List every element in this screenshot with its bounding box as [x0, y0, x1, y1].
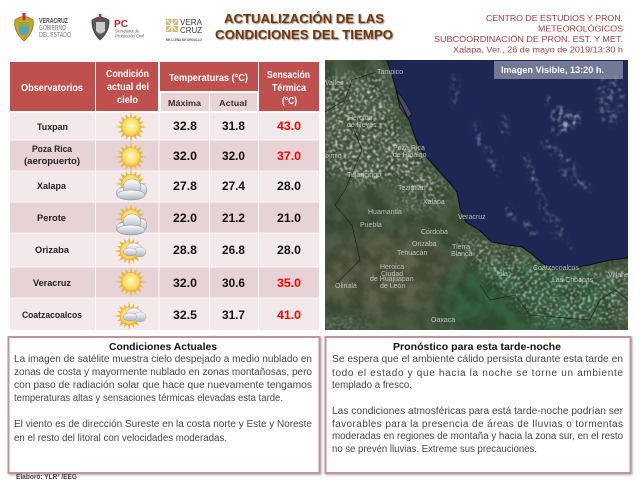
- row: Coatzacoalcos: Coatzacoalcos: [22, 310, 82, 320]
- body text: El viento es de dirección Sureste en la costa norte y Este y Noreste: [14, 419, 312, 430]
- coast and state lines: [325, 60, 628, 320]
- logo: Gobierno del Estado de Veracruz: DEL ESTADO: [39, 32, 71, 39]
- heading: Condiciones Actuales: [109, 341, 217, 353]
- body text: La imagen de satélite muestra cielo despejado a medio nublado en: [14, 354, 312, 365]
- row: Tuxpan: 31.8: [222, 119, 245, 133]
- body text: moderadas en regiones de montaña y hacia la zona sur, en el resto: [332, 431, 623, 442]
- panel: forecast: [326, 337, 630, 473]
- row: Orizaba: Orizaba: [35, 245, 69, 255]
- row: Orizaba: 28.0: [277, 243, 301, 257]
- issuing office: CENTRO DE ESTUDIOS Y PRON.: [486, 13, 623, 23]
- city labels: de Hidalgo: [393, 152, 427, 159]
- row: Xalapa: Xalapa: [37, 181, 66, 191]
- row: Tuxpan: 43.0: [277, 119, 301, 133]
- icon: sunny: [115, 111, 147, 143]
- row: Veracruz: 30.6: [222, 276, 245, 290]
- table header: [10, 62, 319, 111]
- city labels: Orizaba: [412, 241, 437, 248]
- title: CONDICIONES DEL TIEMPO: [215, 27, 393, 42]
- city labels: de Reyes: [347, 122, 377, 129]
- icon: sun with small cloud: [114, 301, 146, 331]
- city labels: Isla: [497, 271, 508, 278]
- issuing office: METEOROLÓGICOS: [538, 24, 623, 34]
- logo: Gobierno del Estado de Veracruz: GOBIERNO: [39, 25, 66, 32]
- row: Perote: Perote: [37, 213, 66, 223]
- icon: sunny: [115, 266, 147, 298]
- icon: ornamental square: [166, 19, 178, 32]
- row: Veracruz: 35.0: [277, 276, 301, 290]
- row: Perote: 22.0: [173, 211, 197, 225]
- row: Perote: 21.0: [277, 211, 301, 225]
- body text: [14, 354, 312, 444]
- row: Tuxpan: 32.8: [173, 119, 197, 133]
- row: Orizaba: 26.8: [222, 243, 245, 257]
- table header: cielo: [117, 95, 138, 106]
- city labels: Ciudad: [381, 271, 403, 278]
- title: ACTUALIZACIÓN DE LAS: [224, 11, 384, 26]
- row: Poza Rica: 32.0: [173, 149, 197, 163]
- icon: sun behind heavy cloud: [115, 168, 147, 200]
- logo: Vera Cruz: [166, 18, 203, 42]
- table header: (°C): [282, 96, 297, 107]
- city labels: Valles: [325, 80, 344, 87]
- city labels: Puebla: [360, 222, 382, 229]
- body text: zonas de costa y mayormente nublado en zonas montañosas, pero: [14, 367, 312, 378]
- icon: grey crest: [92, 14, 109, 40]
- row backgrounds: [10, 113, 319, 330]
- logo: Gobierno del Estado de Veracruz: VERACRUZ: [39, 18, 69, 25]
- image time badge: [494, 61, 623, 79]
- logo: Protección Civil: Secretaría de: [115, 28, 139, 34]
- city labels: de León: [380, 283, 405, 290]
- city labels: Poza Rica: [393, 145, 425, 152]
- row: Coatzacoalcos: 32.5: [173, 308, 197, 322]
- row: Tuxpan: Tuxpan: [37, 122, 68, 132]
- city labels: Villahe: [608, 272, 629, 279]
- body text: templado a fresco.: [332, 380, 412, 391]
- satellite image map: [320, 60, 629, 340]
- panel: observatories table: [10, 62, 319, 331]
- panel: current conditions: [8, 337, 320, 473]
- row: Orizaba: [35, 236, 301, 266]
- city labels: Teziutlán: [398, 185, 426, 192]
- row: Veracruz: [33, 266, 301, 298]
- body text: no se prevén lluvias. Extreme sus precauciones.: [332, 444, 537, 455]
- city labels: Oaxaca: [431, 317, 455, 324]
- row: Xalapa: [37, 168, 301, 200]
- city labels: Huamantla: [368, 209, 402, 216]
- icon: state crest: [15, 13, 33, 41]
- city labels: Coatzacoalcos: [533, 265, 579, 272]
- table header: actual del: [107, 82, 149, 93]
- table header: Condición: [106, 69, 149, 80]
- heading: Pronóstico para esta tarde-noche: [393, 341, 561, 353]
- issuing office: Xalapa, Ver., 26 de mayo de 2019/13:30 h: [453, 44, 623, 54]
- icon: sunny: [115, 141, 147, 173]
- city labels: Tampico: [377, 69, 403, 76]
- body text: Se espera que el ambiente cálido persista durante esta tarde en: [332, 354, 623, 365]
- table header: Sensación: [267, 70, 310, 81]
- row: Coatzacoalcos: [22, 301, 301, 331]
- body text: todo el estado y que hacia la noche se torne un ambiente: [332, 368, 623, 379]
- table header: Máxima: [168, 98, 201, 108]
- body text: con paso de radiación solar que hace que nuevamente tengamos: [14, 380, 312, 391]
- city labels: Córdoba: [421, 229, 448, 236]
- city labels: Blanca: [451, 251, 473, 258]
- row: Xalapa: 27.4: [222, 179, 245, 193]
- city labels: Tehuacán: [397, 250, 427, 257]
- logo: Vera Cruz: VERA: [180, 18, 203, 27]
- city labels: Las Choapas: [552, 277, 594, 284]
- title: [215, 11, 393, 42]
- logo: Protección Civil: Protección Civil: [115, 34, 144, 38]
- row: Veracruz: Veracruz: [33, 278, 72, 288]
- row: Poza Rica: (aeropuerto): [24, 156, 80, 166]
- city labels: Xalapa: [423, 199, 445, 206]
- logo: Vera Cruz: CRUZ: [180, 26, 202, 35]
- table header: Térmica: [272, 83, 306, 94]
- icon: sun behind heavy cloud: [115, 203, 147, 235]
- body text: favorables para la presencia de áreas de lluvias o tormentas: [332, 419, 623, 430]
- lagoon: [396, 90, 412, 118]
- row: Perote: [37, 203, 301, 235]
- row: Veracruz: 32.0: [173, 276, 197, 290]
- land: [320, 60, 628, 340]
- city labels: de Huajuapan: [370, 276, 414, 283]
- city labels: Tulancingo: [347, 172, 381, 179]
- table header: Observatorios: [21, 83, 83, 94]
- icon: sun with small cloud: [114, 236, 146, 266]
- row: Poza Rica: Poza Rica: [32, 144, 72, 154]
- city labels: Olinalá: [335, 283, 357, 290]
- row: Tuxpan: [37, 111, 301, 143]
- table header: Temperaturas (°C): [169, 73, 248, 84]
- image time badge: Imagen Visible, 13:20 h.: [501, 65, 604, 76]
- city labels: Ixmiq: [325, 153, 342, 160]
- body text: en el resto del litoral con velocidades moderadas.: [14, 433, 227, 444]
- city labels: Heroica: [348, 115, 372, 122]
- row: Poza Rica: 32.0: [222, 149, 245, 163]
- body text: [332, 354, 624, 455]
- row: Orizaba: 28.8: [173, 243, 197, 257]
- city labels: Tierra: [452, 244, 470, 251]
- row: Coatzacoalcos: 41.0: [277, 308, 301, 322]
- ocean clouds: [449, 73, 626, 250]
- body text: Las condiciones atmosféricas para está tarde-noche podrían ser: [332, 406, 624, 417]
- row: Xalapa: 27.8: [173, 179, 197, 193]
- logo: Protección Civil: [92, 14, 144, 40]
- table header: Actual: [219, 98, 247, 108]
- city labels: Veracruz: [458, 214, 486, 221]
- issuing office: SUBCOORDINACIÓN DE PRON. EST. Y MET.: [434, 34, 623, 44]
- body text: temperaturas altas y sensaciones térmicas elevadas esta tarde.: [14, 393, 283, 404]
- city labels: Heroica: [380, 264, 404, 271]
- logo: Gobierno del Estado de Veracruz: [15, 13, 71, 41]
- city labels: [325, 69, 629, 324]
- row: Xalapa: 28.0: [277, 179, 301, 193]
- row: Poza Rica: [24, 141, 301, 173]
- row: Perote: 21.2: [222, 211, 245, 225]
- row: Coatzacoalcos: 31.7: [222, 308, 245, 322]
- issuing office: [434, 13, 623, 54]
- row: Poza Rica: 37.0: [277, 149, 301, 163]
- logo: Protección Civil: PC: [114, 19, 128, 30]
- logo: Vera Cruz: ME LLENA DE ORGULLO: [166, 38, 202, 42]
